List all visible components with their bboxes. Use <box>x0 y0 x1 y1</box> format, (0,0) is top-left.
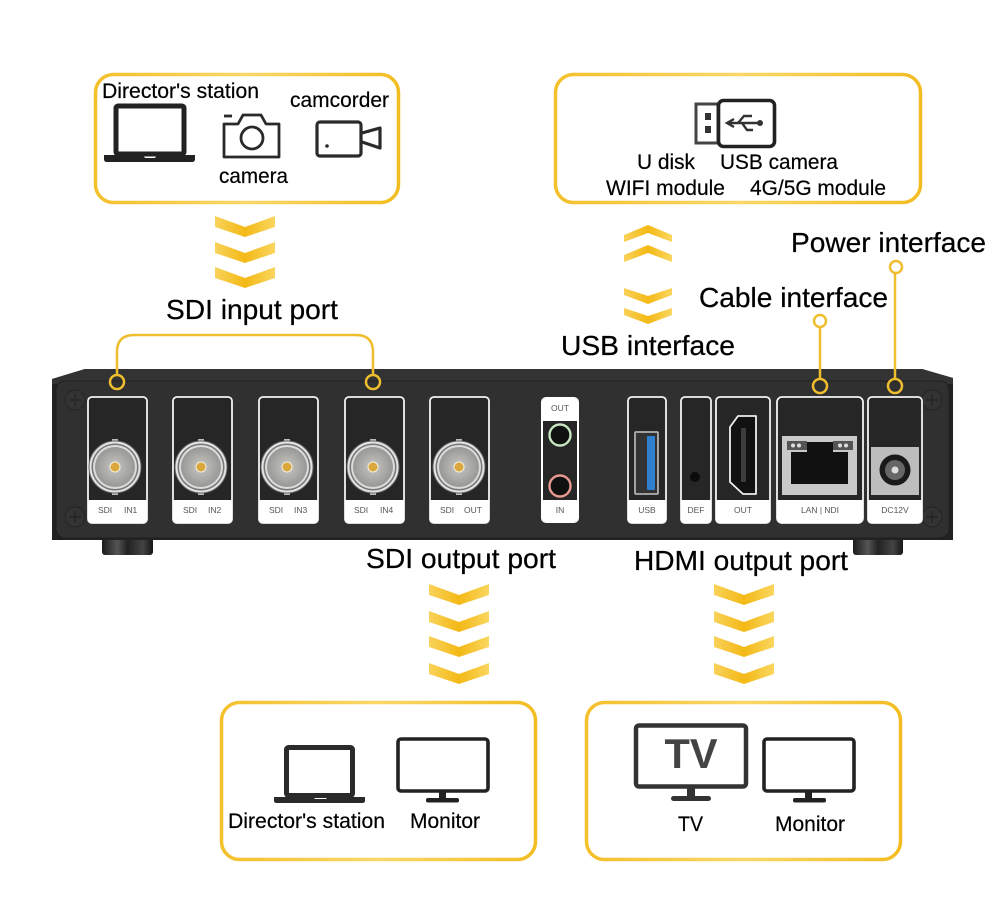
label: USB camera: USB camera <box>720 150 838 174</box>
port: LAN NDI: LAN | NDI <box>801 505 839 515</box>
screws <box>65 390 942 527</box>
label: camera: camera <box>219 164 288 188</box>
label: Monitor: Monitor <box>775 812 845 836</box>
port: LAN NDI <box>777 397 863 523</box>
heading: Cable interface: Cable interface <box>699 282 888 313</box>
panel: SDI input sources <box>96 74 398 202</box>
heading: SDI output port: SDI output port <box>366 543 556 574</box>
port: SDI IN3: IN3 <box>294 505 308 515</box>
port: HDMI OUT <box>716 397 770 523</box>
arrow: HDMI output chevrons <box>714 584 774 684</box>
device: rear panel <box>52 369 953 555</box>
device feet <box>102 538 903 555</box>
port: SDI IN2: IN2 <box>208 505 222 515</box>
heading: Power interface: Power interface <box>791 227 986 258</box>
port: audio out and in <box>541 397 579 523</box>
port: USB: USB <box>638 505 656 515</box>
icon: monitor <box>398 739 488 802</box>
port: SDI IN2: SDI <box>183 505 197 515</box>
port: SDI IN3: SDI <box>269 505 283 515</box>
port: SDI IN1 <box>88 397 147 523</box>
label: TV: TV <box>678 812 704 836</box>
icon: USB stick <box>696 100 774 146</box>
icon: laptop <box>104 106 195 162</box>
icon: TV: TV <box>664 730 718 777</box>
port: DEF <box>681 397 711 523</box>
label: U disk: U disk <box>637 150 695 174</box>
port: DC12V <box>868 397 922 523</box>
port: SDI OUT <box>430 397 489 523</box>
label: 4G/5G module: 4G/5G module <box>750 176 886 200</box>
callout: cable interface pointer <box>813 315 827 393</box>
panel: SDI output devices <box>222 702 536 860</box>
port: SDI IN4: SDI <box>354 505 368 515</box>
heading: SDI input port: SDI input port <box>166 294 338 325</box>
port: SDI IN4 <box>345 397 404 523</box>
icon: TV <box>636 726 746 801</box>
port: audio out and in: IN <box>556 505 564 515</box>
arrow: SDI output chevrons <box>429 584 489 684</box>
port: SDI OUT: OUT <box>464 505 482 515</box>
panel: HDMI output devices <box>586 702 900 860</box>
label: camcorder: camcorder <box>290 88 389 112</box>
port: SDI IN3 <box>259 397 318 523</box>
port: USB <box>628 397 666 523</box>
label: Director's station: Director's station <box>102 79 259 103</box>
icon: camera <box>224 115 279 157</box>
port: SDI OUT: SDI <box>440 505 454 515</box>
icon: laptop <box>274 748 365 803</box>
icon: monitor <box>764 739 854 802</box>
callout: power interface pointer <box>888 261 902 393</box>
label: WIFI module: WIFI module <box>606 176 725 200</box>
heading: HDMI output port: HDMI output port <box>634 545 848 576</box>
arrow: SDI input chevrons <box>215 216 275 288</box>
port: audio out and in: OUT <box>551 403 569 413</box>
port: SDI IN1: IN1 <box>124 505 138 515</box>
callout: SDI input bracket <box>110 335 380 389</box>
port: DC12V: DC12V <box>881 505 909 515</box>
port: SDI IN1: SDI <box>98 505 112 515</box>
heading: USB interface: USB interface <box>561 330 735 361</box>
port: SDI IN2 <box>173 397 232 523</box>
port: DEF: DEF <box>688 505 704 515</box>
label: Director's station: Director's station <box>228 809 385 833</box>
port: SDI IN4: IN4 <box>380 505 394 515</box>
label: Monitor: Monitor <box>410 809 480 833</box>
arrow: USB up and down chevrons <box>624 225 672 324</box>
port: HDMI OUT: OUT <box>734 505 752 515</box>
icon: camcorder <box>317 122 380 156</box>
panel: USB devices <box>556 74 920 202</box>
